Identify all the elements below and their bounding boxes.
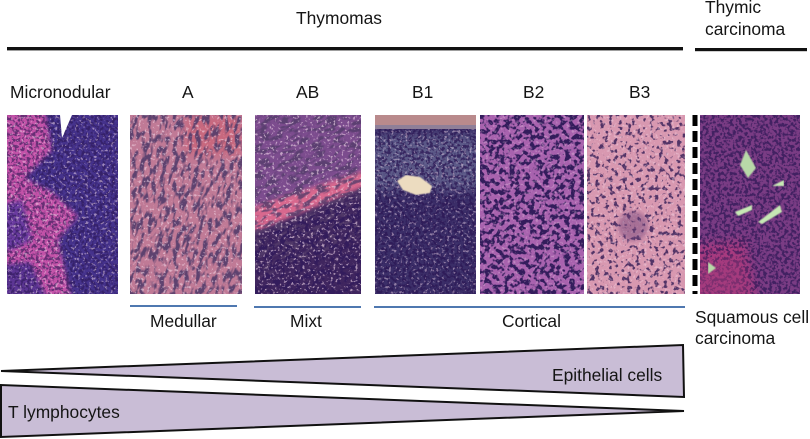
divider: carcinoma bar [695,48,807,51]
label: B2: B2 [523,82,544,102]
divider: dashed boundary [692,115,698,294]
label: Mixt: Mixt [290,311,322,331]
label: B1: B1 [412,82,433,102]
panel: Type B3 histology [587,115,685,294]
heading: Thymic carcinoma: carcinoma [705,19,786,39]
panel: Type A histology [130,115,242,294]
bracket: Medullar [130,305,237,307]
label: Medullar: Medullar [150,311,217,331]
bracket: Cortical [374,306,685,308]
label: A: A [182,82,194,102]
label: B3: B3 [629,82,650,102]
panel: Type B2 histology [480,115,584,294]
wedge: Epithelial cells gradient: Epithelial cells [552,365,662,385]
wedge: T lymphocytes gradient [1,385,684,437]
panel: Type AB histology [255,115,361,294]
label: Squamous cell carcinoma: carcinoma [695,328,776,348]
label: Cortical: Cortical [502,311,561,331]
label: Squamous cell carcinoma: Squamous cell [695,307,809,327]
bracket: Mixt [254,306,361,308]
panel: Micronodular histology [7,115,118,294]
label: Micronodular: Micronodular [10,82,111,102]
divider: thymomas bar [7,47,683,50]
wedge: T lymphocytes gradient: T lymphocytes [8,402,120,422]
label: AB: AB [296,82,319,102]
panel: Type B1 histology [375,115,476,294]
wedge: Epithelial cells gradient [1,345,684,397]
panel: Squamous cell carcinoma histology [700,115,800,294]
heading: Thymomas: Thymomas [296,8,382,28]
